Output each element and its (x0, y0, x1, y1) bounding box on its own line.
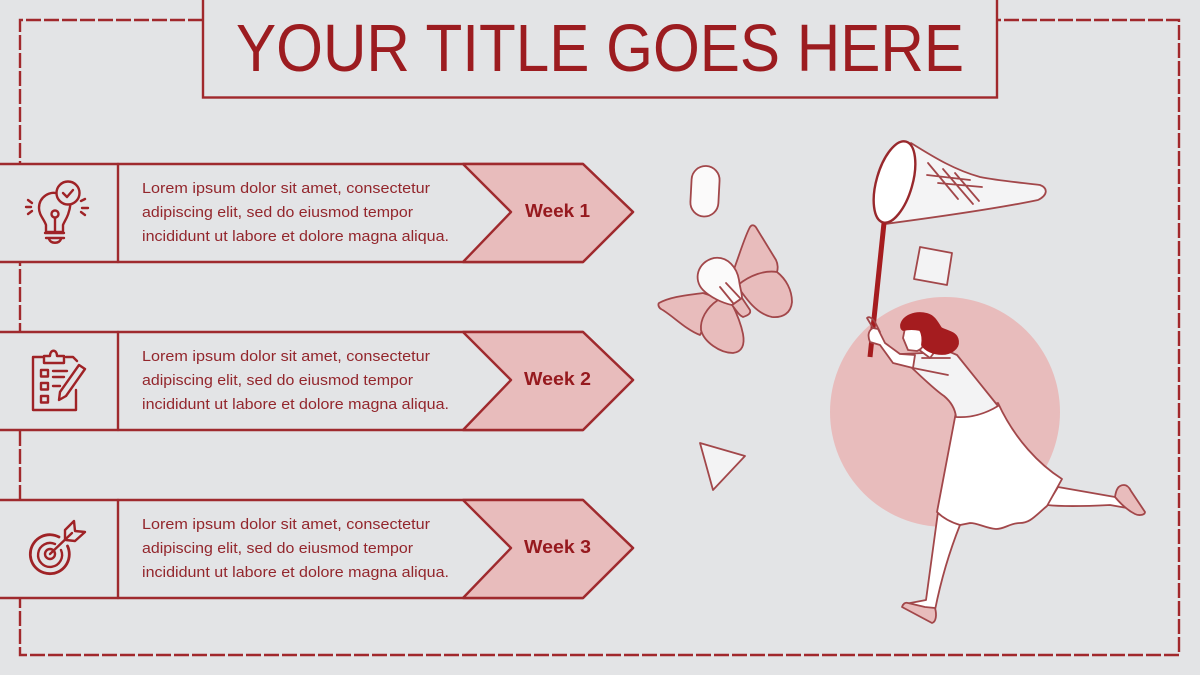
butterfly net (866, 137, 1046, 357)
skirt (937, 403, 1062, 529)
row 1 text: incididunt ut labore et dolore magna aliqua. (142, 229, 449, 245)
butterfly upper right wing (733, 225, 778, 290)
row 1: week 1 (0, 164, 633, 262)
row 2: week 2 (0, 332, 633, 430)
icon: light bulb with check (26, 182, 88, 243)
row 1 text: Lorem ipsum dolor sit amet, consectetur (142, 181, 430, 197)
butterfly with light bulb (658, 225, 792, 353)
row 1 divider (117, 164, 119, 262)
row 2 text: incididunt ut labore et dolore magna aliqua. (142, 397, 449, 413)
row 1 text: adipiscing elit, sed do eiusmod tempor (142, 205, 413, 221)
bulb base (732, 298, 750, 317)
row 3 label: Week 3 (524, 537, 591, 557)
icon: target with arrow (30, 521, 85, 574)
row 2 chevron (463, 332, 633, 430)
pink background circle (830, 297, 1060, 527)
row 3: week 3 (0, 500, 633, 598)
row 1 chevron (463, 164, 633, 262)
butterfly lower right wing (738, 272, 792, 317)
net pole (870, 223, 884, 357)
row 3 text: incididunt ut labore et dolore magna aliqua. (142, 565, 449, 581)
row 3 text: Lorem ipsum dolor sit amet, consectetur (142, 517, 430, 533)
net hoop (866, 137, 923, 227)
woman chasing with net (867, 313, 1145, 623)
butterfly left wing (658, 293, 718, 335)
row 1 label: Week 1 (525, 201, 590, 221)
neck (918, 344, 936, 358)
hair (901, 313, 958, 354)
icon: clipboard checklist with pencil (33, 351, 85, 410)
face (903, 325, 923, 351)
row 3 divider (117, 500, 119, 598)
title box (203, 0, 997, 98)
shape: tilted square (914, 247, 952, 285)
bulb glass (698, 258, 742, 305)
butterfly lower left wing (701, 300, 744, 353)
shape: rounded pill (690, 165, 720, 217)
front leg (905, 512, 960, 610)
net mesh (927, 163, 982, 204)
back shoe (1115, 485, 1145, 515)
front shoe (902, 603, 936, 623)
row 3 arrow panel (0, 500, 633, 598)
title: YOUR TITLE GOES HERE (236, 11, 964, 86)
row 2 label: Week 2 (524, 369, 591, 389)
net bag (885, 143, 1046, 224)
row 1 arrow panel (0, 164, 633, 262)
row 3 chevron (463, 500, 633, 598)
arm holding pole (869, 328, 915, 368)
shape: triangle (700, 443, 745, 490)
row 2 divider (117, 332, 119, 430)
row 3 text: adipiscing elit, sed do eiusmod tempor (142, 541, 413, 557)
blouse (900, 352, 998, 417)
row 2 arrow panel (0, 332, 633, 430)
back leg (1047, 487, 1127, 508)
row 2 text: Lorem ipsum dolor sit amet, consectetur (142, 349, 430, 365)
row 2 text: adipiscing elit, sed do eiusmod tempor (142, 373, 413, 389)
